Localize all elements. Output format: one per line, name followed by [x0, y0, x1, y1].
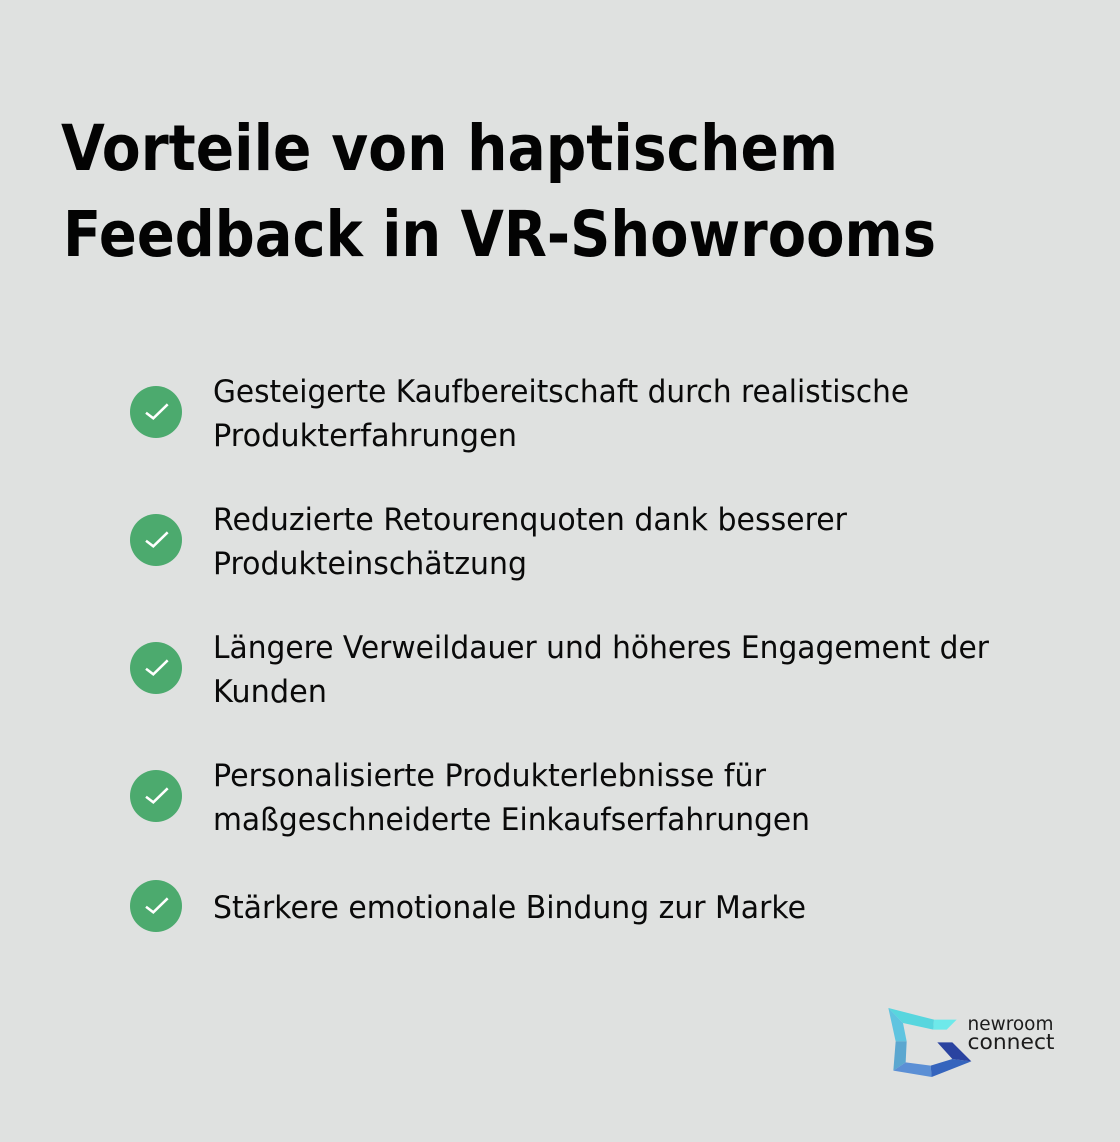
- text: benefit 1: Produkterfahrungen: [213, 418, 517, 454]
- list of benefits: [130, 374, 989, 932]
- benefit 2: [130, 502, 847, 582]
- text: benefit 2: Produkteinschätzung: [213, 546, 527, 582]
- logo wordmark: connect: [968, 1030, 1054, 1054]
- text: benefit 2: Reduzierte Retourenquoten dank besserer: [213, 502, 847, 538]
- text: benefit 3: [213, 630, 989, 710]
- benefit 5: [130, 880, 806, 932]
- logo wordmark: [968, 1013, 1054, 1054]
- title: Vorteile von haptischem: [61, 112, 838, 185]
- icon: check circle 4: [130, 770, 182, 822]
- text: benefit 3: Kunden: [213, 674, 327, 710]
- logo: newroom connect: [888, 1008, 1054, 1077]
- text: benefit 1: Gesteigerte Kaufbereitschaft durch realistische: [213, 374, 909, 410]
- text: benefit 4: Personalisierte Produkterlebnisse für: [213, 758, 766, 794]
- text: benefit 4: maßgeschneiderte Einkaufserfahrungen: [213, 802, 810, 838]
- text: benefit 2: [213, 502, 847, 582]
- icon: check circle 3: [130, 642, 182, 694]
- benefit 1: [130, 374, 909, 454]
- text: benefit 3: Längere Verweildauer und höheres Engagement der: [213, 630, 989, 666]
- icon: check circle 5: [130, 880, 182, 932]
- icon: check circle 2: [130, 514, 182, 566]
- icon: logo mark: [888, 1008, 971, 1077]
- title: [61, 112, 936, 271]
- text: benefit 1: [213, 374, 909, 454]
- title: Feedback in VR-Showrooms: [63, 198, 936, 271]
- icon: check circle 1: [130, 386, 182, 438]
- logo wordmark: newroom: [968, 1013, 1054, 1035]
- text: benefit 4: [213, 758, 810, 838]
- benefit 4: [130, 758, 810, 838]
- text: benefit 5: Stärkere emotionale Bindung zur Marke: [213, 890, 806, 926]
- benefit 3: [130, 630, 989, 710]
